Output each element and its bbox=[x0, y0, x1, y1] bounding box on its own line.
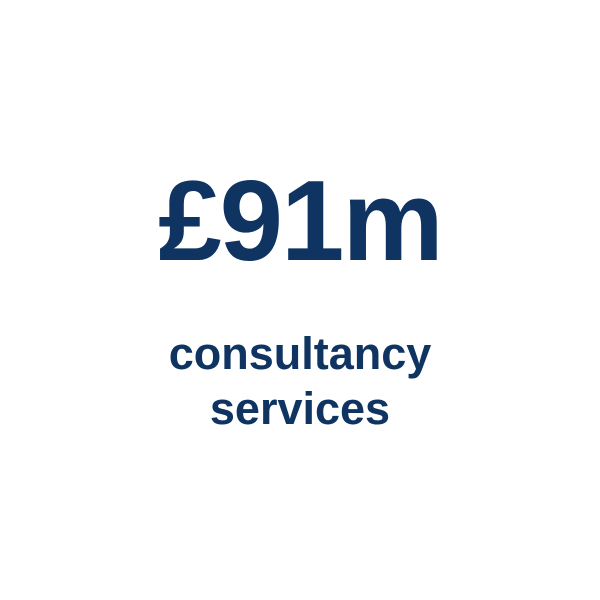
label text: consultancy bbox=[169, 328, 431, 379]
label text: services bbox=[210, 383, 390, 434]
label text bbox=[169, 328, 431, 434]
headline figure: £91m bbox=[158, 158, 442, 285]
